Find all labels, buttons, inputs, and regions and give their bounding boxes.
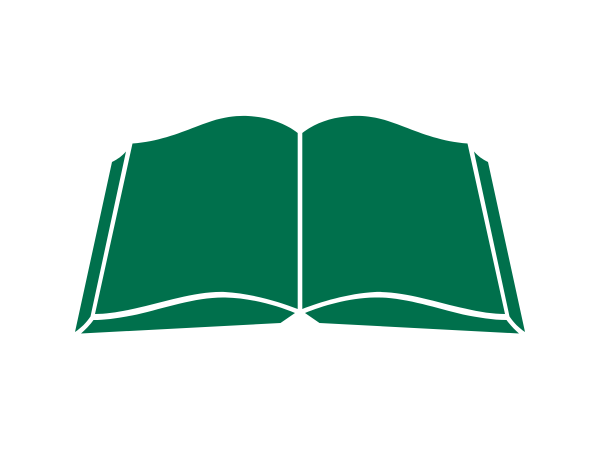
left page (95, 116, 298, 314)
left lower cover (81, 297, 295, 334)
right page (302, 116, 505, 314)
right lower cover (305, 297, 519, 334)
right half of book (302, 116, 525, 333)
right cover strip (474, 152, 525, 332)
left cover strip (75, 152, 126, 332)
left half of book (75, 116, 298, 333)
